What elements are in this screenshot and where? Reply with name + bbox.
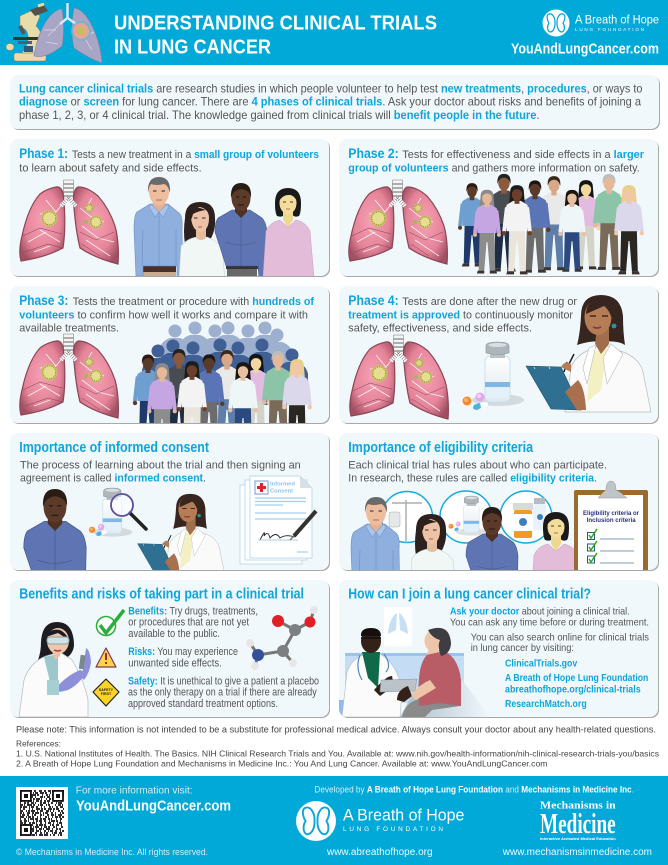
heading: Benefits and risks of taking part in a clinical trial (19, 587, 304, 603)
phase 4 text: Phase 4: (348, 293, 399, 308)
phase 4 text (348, 293, 577, 335)
phase 3 text: volunteers to confirm how well it works and compare it with (19, 309, 308, 321)
link list: abreathofhope.org/clinical-trials (505, 683, 641, 695)
panel: introduction: phase 1, 2, 3, or 4 clinical trial. The knowledge gained from clinical trials will benefit people in the future. (19, 108, 540, 122)
disclaimer note: Please note: This information is not intended to be a substitute for professional medical advice. Always consult your doctor about any health-related questions. (16, 725, 656, 735)
phase 2 text: Tests for effectiveness and side effects in a larger (402, 149, 645, 161)
illustration: doctor with clipboard (526, 295, 651, 412)
illustration: vial under magnifier (89, 488, 146, 537)
phase 3 text: Phase 3: (19, 293, 68, 308)
risks text: unwanted side effects. (128, 657, 222, 669)
footer link block: YouAndLungCancer.com (76, 798, 231, 815)
references: References: (16, 739, 61, 749)
safety text: as the only therapy on a trial if there are already (128, 686, 317, 698)
phase 1 text (19, 146, 319, 175)
panel: phase 2 (339, 139, 659, 277)
illustration: patient (23, 489, 87, 570)
phase 2 text: group of volunteers and gathers more information on safety. (348, 163, 640, 175)
eligibility text: In research, these rules are called eligibility criteria. (348, 473, 597, 485)
illustration: eligibility clipboard: Inclusion criteria (587, 517, 636, 524)
title (114, 12, 437, 58)
illustration: consent form: Informed (270, 482, 295, 488)
phase 3 text: Tests the treatment or procedure with hundreds of (73, 296, 314, 308)
ask your doctor text: Ask your doctor about joining a clinical trial. (450, 606, 630, 618)
title: UNDERSTANDING CLINICAL TRIALS (114, 12, 437, 34)
icon: green check (96, 610, 124, 636)
heading: Importance of informed consent (19, 440, 209, 456)
panel: introduction (10, 75, 660, 130)
illustration: lungs (350, 335, 448, 419)
panel: informed consent (10, 433, 330, 571)
logo: A Breath of Hope: LUNG FOUNDATION (575, 27, 644, 32)
website: abreathofhope: www.abreathofhope.org (326, 847, 432, 858)
phase 4 text: Tests are done after the new drug or (402, 296, 577, 308)
phase 1 text: Tests a new treatment in a small group of volunteers (72, 149, 319, 161)
eligibility text (348, 460, 607, 485)
logo: A Breath of Hope large: A Breath of Hope (343, 807, 464, 825)
logo: Mechanisms in Medicine: Mechanisms in (540, 800, 616, 811)
illustration: doctor with clipboard (138, 494, 225, 576)
logo: A Breath of Hope large (296, 801, 464, 841)
logo: Mechanisms in Medicine: Interactive Animated Medical Education (540, 837, 616, 841)
risks text: Risks: You may experience (128, 646, 238, 658)
consent text: The process of learning about the trial and then signing an (20, 460, 301, 472)
illustration: vial and pills (462, 342, 524, 410)
phase 1 text: to learn about safety and side effects. (19, 163, 202, 175)
illustration: four volunteers (134, 177, 314, 282)
illustration: lungs (349, 180, 447, 264)
website: mechanismsinmedicine: www.mechanismsinmedicine.com (502, 847, 652, 858)
icon: IV drip circle (382, 492, 432, 543)
panel: benefits and risks (10, 580, 330, 718)
illustration: crowd of volunteers (132, 322, 312, 423)
illustration: ten volunteers (458, 174, 644, 274)
consent text (20, 460, 301, 485)
eligibility text: Each clinical trial has rules about who can participate. (348, 460, 607, 472)
icon: lungs (34, 3, 102, 63)
footer band (0, 776, 668, 865)
illustration: consent form: Consent (270, 489, 293, 495)
illustration: lungs (20, 180, 118, 264)
panel: how to join (339, 580, 659, 718)
benefits text (128, 606, 258, 640)
logo: A Breath of Hope: A Breath of Hope (575, 14, 659, 26)
phase 2 text (348, 146, 645, 175)
icon: warning triangle (96, 648, 116, 667)
safety text: Safety: It is unethical to give a patient a placebo (128, 676, 319, 688)
icon: microscope (6, 4, 48, 61)
illustration: doctor and patient consultation (339, 607, 490, 717)
illustration: participants (350, 497, 574, 570)
illustration: consent form (240, 476, 316, 564)
QR code (16, 787, 68, 839)
heading: Importance of eligibility criteria (348, 440, 534, 456)
illustration: lungs (20, 334, 118, 418)
phase 1 text: Phase 1: (19, 146, 68, 161)
icon: vial circle (440, 491, 492, 543)
copyright: © Mechanisms in Medicine Inc. All rights reserved. (16, 847, 208, 857)
footer link block: For more information visit: (76, 785, 193, 796)
consent text: agreement is called informed consent. (20, 473, 206, 485)
icon: prescription bottles circle (500, 491, 552, 543)
phase 2 text: Phase 2: (348, 146, 399, 161)
icon: safety first sign: FIRST (101, 692, 112, 696)
logo: A Breath of Hope (542, 10, 659, 36)
panel: introduction: diagnose or screen for lung cancer. There are 4 phases of clinical trials. Ask your doctor about risks and benefits of joining a (19, 95, 641, 109)
phase 3 text (19, 293, 314, 335)
safety text: approved standard treatment options. (128, 698, 278, 710)
link list: ClinicalTrials.gov (505, 657, 577, 669)
footer link block (76, 785, 231, 815)
illustration: scientist (19, 622, 91, 717)
safety text (128, 676, 319, 710)
search online text: You can also search online for clinical trials (471, 631, 649, 643)
icon: safety first sign: SAFETY (99, 688, 114, 692)
panel: phase 3 (10, 286, 330, 424)
phase 4 text: treatment is approved to continuously monitor (348, 309, 573, 321)
panel: phase 1 (10, 139, 330, 282)
developed by line: Developed by A Breath of Hope Lung Foundation and Mechanisms in Medicine Inc. (314, 785, 634, 795)
illustration: eligibility clipboard: Eligibility criteria or (583, 510, 640, 517)
panel: phase 4 (339, 286, 659, 424)
search online text: in lung cancer by visiting: (471, 642, 574, 654)
illustration: eligibility clipboard (574, 481, 648, 575)
title: IN LUNG CANCER (114, 36, 271, 58)
panel: eligibility criteria (339, 433, 659, 571)
link list: ResearchMatch.org (505, 698, 587, 710)
heading: How can I join a lung cancer clinical trial? (348, 587, 591, 603)
benefits text: or procedures that are not yet (128, 617, 249, 629)
phase 3 text: available treatments. (19, 323, 119, 335)
logo: Mechanisms in Medicine (540, 800, 616, 841)
references: 2. A Breath of Hope Lung Foundation and Mechanisms in Medicine Inc.: You And Lung Cancer. Available at: www.YouAndLungCancer.com (16, 758, 548, 768)
panel: introduction: Lung cancer clinical trials are research studies in which people volunteer to help test new treatments, procedures, or ways to (19, 82, 643, 96)
header band (0, 0, 668, 65)
link list (505, 657, 648, 710)
benefits text: available to the public. (128, 628, 220, 640)
logo: Mechanisms in Medicine: Medicine (540, 808, 616, 840)
references: 1. U.S. National Institutes of Health. The Basics. NIH Clinical Research Trials and You. Available at: www.nih.gov/health-information/nih-clinical-research-trials-you/basics (16, 748, 659, 758)
phase 4 text: safety, effectiveness, and side effects. (348, 323, 532, 335)
ask your doctor text (450, 606, 649, 629)
references (16, 739, 659, 768)
search online text (471, 631, 649, 654)
icon: safety first sign (93, 679, 119, 706)
logo: A Breath of Hope large: LUNG FOUNDATION (343, 826, 443, 833)
risks text (128, 646, 238, 669)
illustration: molecule (246, 606, 318, 670)
benefits text: Benefits: Try drugs, treatments, (128, 606, 258, 618)
